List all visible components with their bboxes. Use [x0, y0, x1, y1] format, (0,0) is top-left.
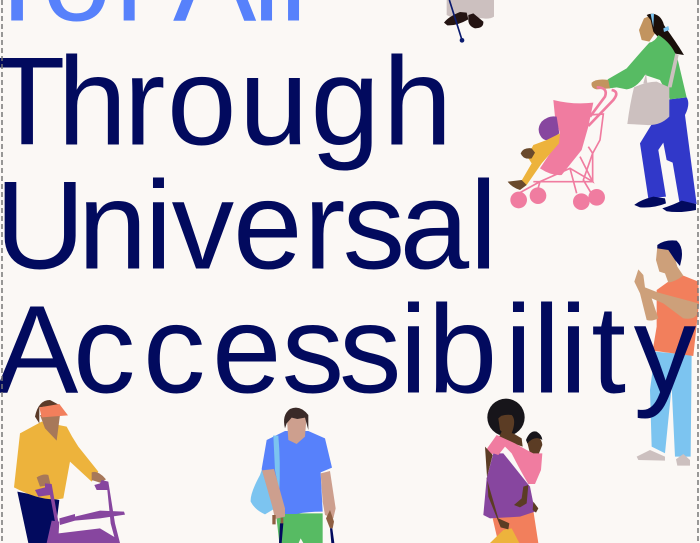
figure: mother carrying a child in a sling: [483, 399, 542, 543]
title: Universal: Universal: [0, 157, 497, 296]
figure: person with white cane, cropped at top: [444, 0, 494, 43]
title: Accessibility: Accessibility: [0, 280, 697, 419]
figure: woman with a wheeled walker: [14, 400, 125, 543]
figure: woman pushing a stroller: [508, 13, 697, 212]
figure: man walking with two canes: [251, 408, 336, 543]
title: Through: Through: [0, 32, 452, 171]
figure: man signing with his hands: [634, 240, 699, 466]
